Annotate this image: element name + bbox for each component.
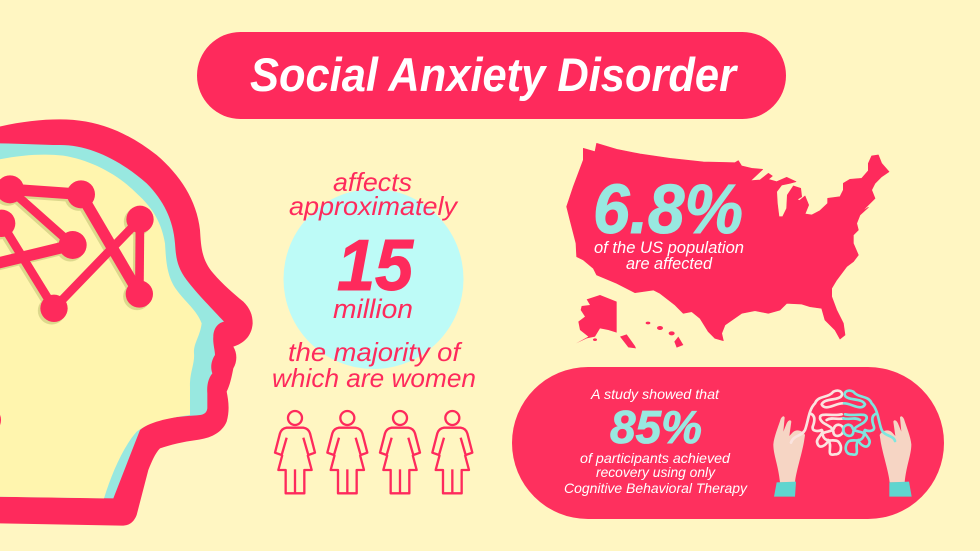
- centre statistic text: [272, 167, 476, 393]
- icon: hands untangling thread: [773, 391, 912, 497]
- centre statistic text: million: [333, 294, 413, 324]
- study text: 85%: [610, 401, 702, 453]
- brain network: [0, 175, 154, 434]
- map statistic text: are affected: [626, 255, 713, 273]
- centre statistic text: approximately: [289, 191, 459, 221]
- study text: recovery using only: [596, 464, 716, 480]
- title banner: [197, 32, 786, 119]
- icons: four women: [275, 411, 472, 493]
- study text: [564, 386, 748, 496]
- map statistic text: 6.8%: [593, 170, 743, 248]
- US map: [567, 143, 889, 348]
- centre statistic text: the majority of: [288, 337, 463, 367]
- head illustration: [0, 119, 253, 526]
- centre statistic text: 15: [337, 226, 414, 306]
- study text: A study showed that: [590, 386, 720, 402]
- study text: of participants achieved: [580, 450, 731, 466]
- centre statistic text: affects: [333, 167, 412, 197]
- cyan circle: [284, 189, 464, 369]
- centre statistic text: which are women: [272, 363, 476, 393]
- study text: Cognitive Behavioral Therapy: [564, 480, 748, 496]
- title banner: Social Anxiety Disorder: [250, 48, 738, 101]
- panel: study result: [512, 367, 944, 519]
- map statistic text: of the US population: [594, 239, 744, 257]
